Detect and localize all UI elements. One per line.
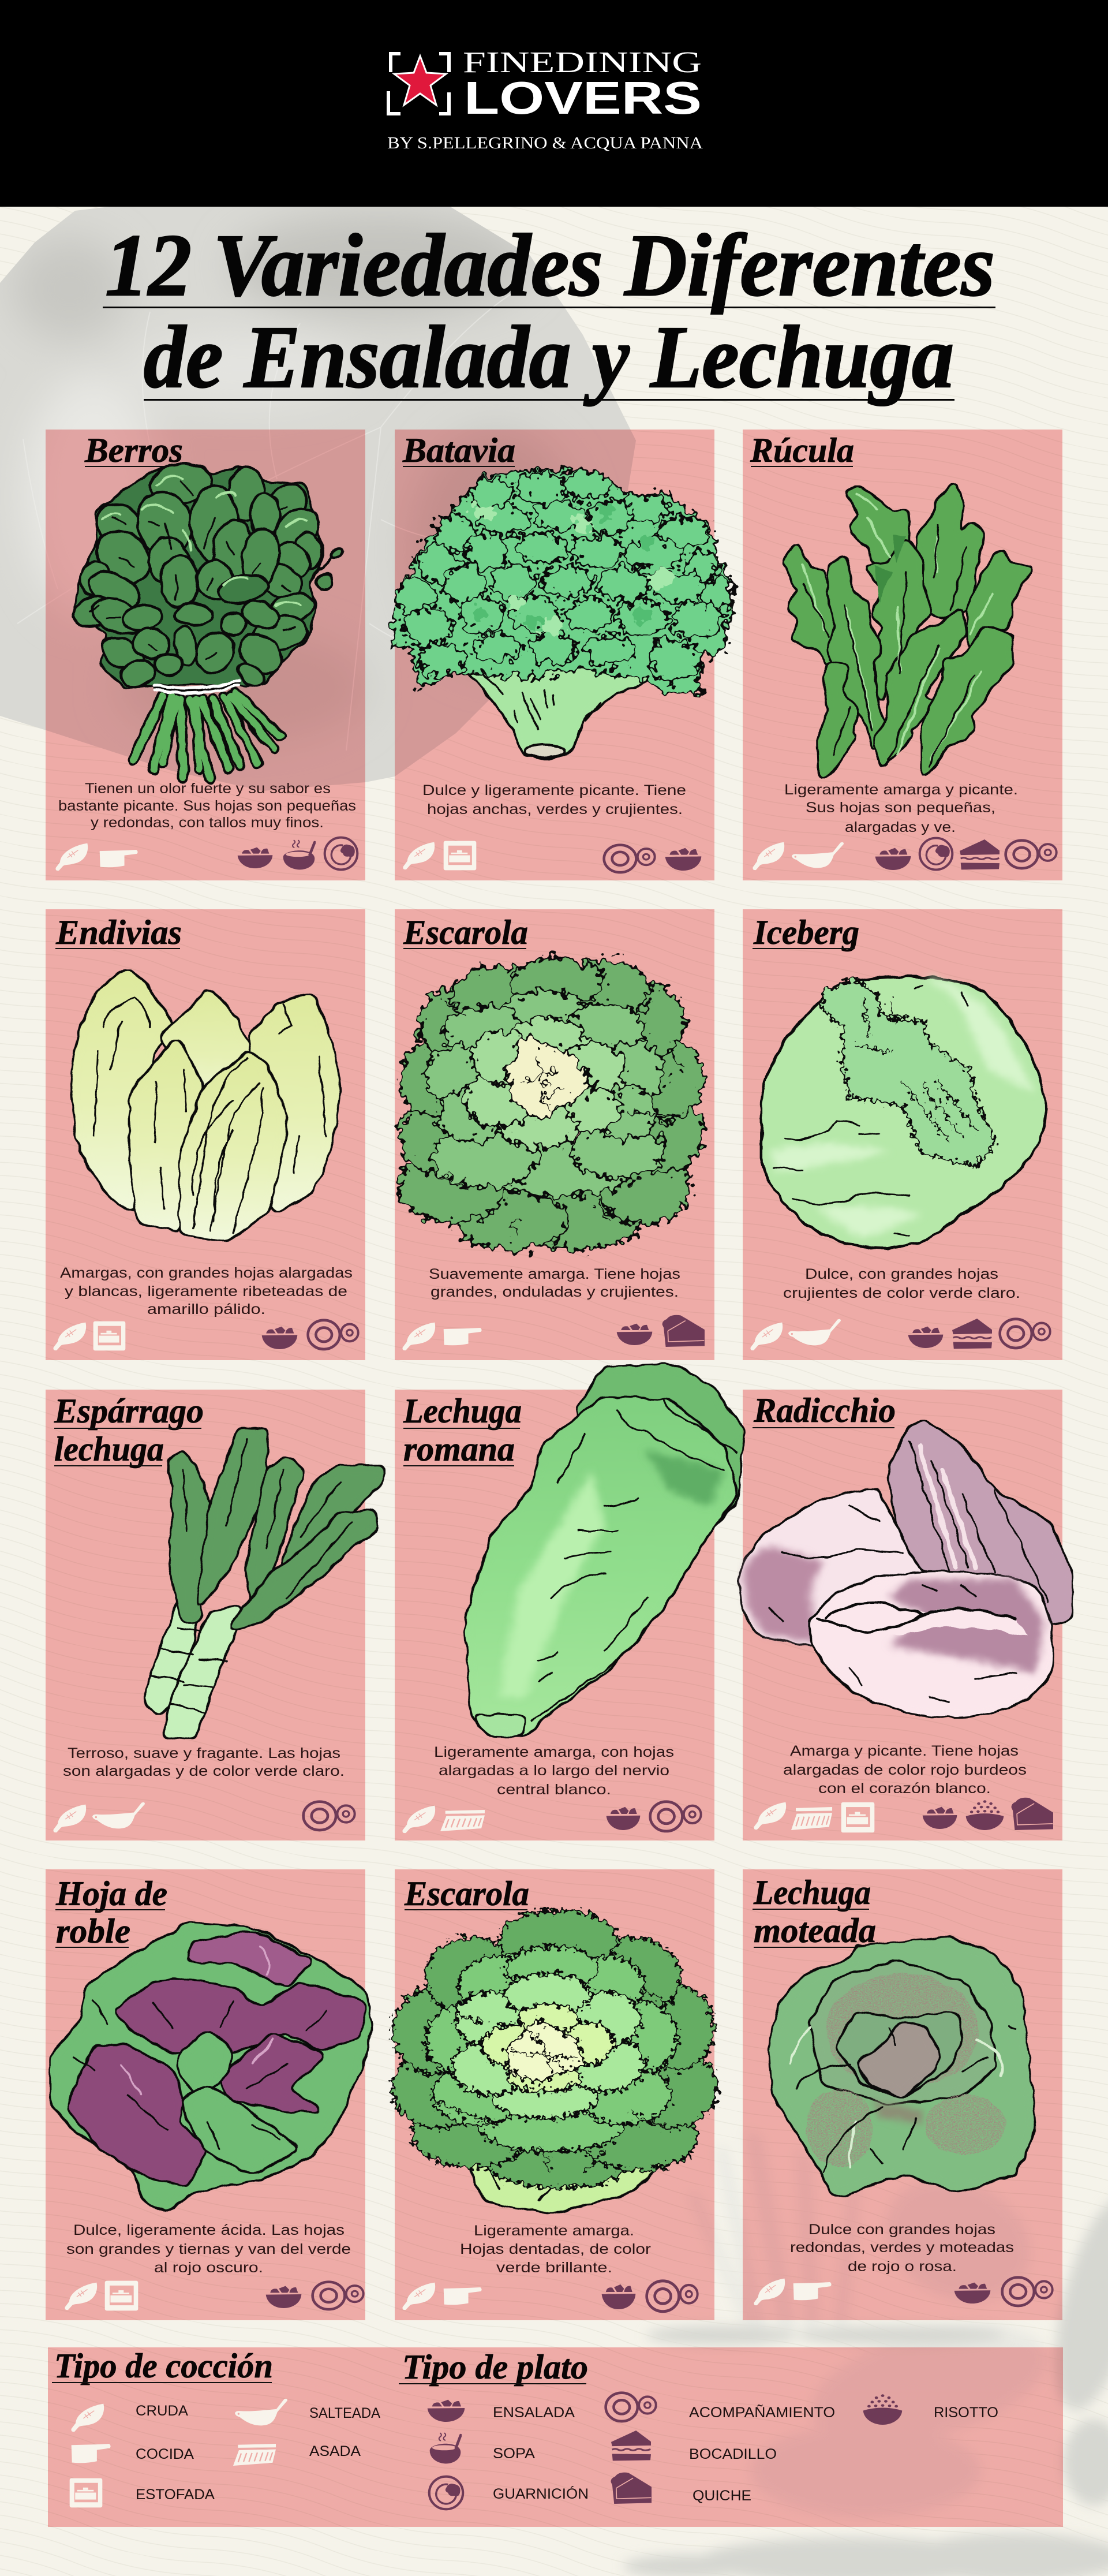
cooking type icons <box>53 1802 145 1832</box>
description: Ligeramente amarga. <box>474 2223 634 2239</box>
dish type icons <box>875 838 1057 870</box>
legend item: acompañamiento: ACOMPAÑAMIENTO <box>689 2404 835 2421</box>
heading: Hoja de <box>55 1875 167 1913</box>
card background <box>743 1869 1062 2320</box>
description: Tienen un olor fuerte y su sabor es <box>85 781 331 797</box>
title: de Ensalada y Lechuga <box>144 308 954 406</box>
card background <box>395 1390 714 1840</box>
panel: Iceberg <box>743 909 1062 1360</box>
logo <box>387 46 703 152</box>
description <box>429 1266 680 1300</box>
legend item: cocida <box>72 2444 194 2463</box>
heading: Escarola <box>403 913 528 951</box>
description <box>783 1743 1027 1797</box>
description: son grandes y tiernas y van del verde <box>66 2241 351 2257</box>
cooking type icons <box>53 1321 125 1350</box>
icon: red star <box>394 56 446 105</box>
illustration: batavia lettuce <box>394 470 736 759</box>
description: Sus hojas son pequeñas, <box>806 800 995 816</box>
description <box>63 1745 345 1779</box>
legend item: ensalada <box>428 2400 575 2422</box>
dish type icons <box>262 1320 358 1349</box>
description <box>58 781 356 831</box>
description: verde brillante. <box>496 2260 612 2276</box>
heading: Escarola <box>404 1875 529 1913</box>
dish type icons <box>266 2282 364 2309</box>
heading: Endivias <box>55 913 182 951</box>
description: Suavemente amarga. Tiene hojas <box>429 1266 680 1282</box>
panel: Endivias <box>46 909 365 1360</box>
description: redondas, verdes y moteadas <box>790 2239 1014 2256</box>
legend item: ensalada: ENSALADA <box>493 2405 575 2421</box>
description: Dulce, ligeramente ácida. Las hojas <box>73 2222 345 2238</box>
legend item: asada: ASADA <box>309 2443 361 2459</box>
legend item: acompañamiento <box>606 2393 835 2421</box>
legend item: risotto <box>863 2394 998 2425</box>
legend item: asada <box>233 2443 361 2466</box>
legend item: salteada <box>235 2399 380 2425</box>
cooking type icons <box>55 843 138 871</box>
cooking type icons <box>402 1806 485 1833</box>
description: Dulce y ligeramente picante. Tiene <box>422 782 686 798</box>
dish type icons <box>602 2281 698 2312</box>
description: central blanco. <box>497 1782 611 1798</box>
cooking type icons <box>402 1323 482 1350</box>
description: Hojas dentadas, de color <box>460 2241 651 2257</box>
panel: Escarola rizada <box>392 1869 717 2320</box>
description: de rojo o rosa. <box>848 2258 957 2275</box>
cooking type icons <box>754 2279 832 2305</box>
title: 12 Variedades Diferentes <box>105 216 995 315</box>
logo wordmark bold: LOVERS <box>464 72 702 124</box>
card background <box>395 1869 714 2320</box>
description: Dulce con grandes hojas <box>808 2222 995 2238</box>
illustration: escarole <box>399 958 703 1249</box>
title <box>103 216 995 406</box>
description <box>460 2223 651 2276</box>
heading: dish type: Tipo de plato <box>402 2348 588 2386</box>
dish type icons <box>954 2278 1053 2306</box>
illustration: iceberg lettuce <box>761 976 1045 1249</box>
illustration: arugula leaves <box>782 482 1032 778</box>
dish type icons <box>908 1319 1050 1349</box>
logo tagline: BY S.PELLEGRINO & ACQUA PANNA <box>387 134 703 152</box>
illustration: speckled lettuce <box>770 1937 1035 2197</box>
heading: Iceberg <box>753 913 859 951</box>
heading: Lechuga <box>753 1873 871 1912</box>
heading <box>54 1392 204 1468</box>
legend item: cocida: COCIDA <box>136 2446 194 2462</box>
heading: lechuga <box>54 1430 164 1468</box>
card background <box>46 430 365 880</box>
legend item: salteada: SALTEADA <box>309 2405 380 2421</box>
heading <box>55 1875 167 1950</box>
heading: Berros <box>84 431 183 469</box>
legend item: cruda: CRUDA <box>136 2403 188 2419</box>
cooking type icons <box>65 2281 138 2310</box>
description <box>434 1744 674 1798</box>
dish type icons <box>238 838 357 869</box>
cooking type icons <box>754 1802 874 1832</box>
logo wordmark: FINEDINING <box>463 46 702 79</box>
panel: Rúcula <box>743 430 1062 880</box>
description <box>790 2222 1014 2275</box>
legend item: sopa <box>430 2433 535 2463</box>
card background <box>395 909 714 1360</box>
description: y redondas, con tallos muy finos. <box>91 815 324 831</box>
panel: legend <box>48 2347 1063 2527</box>
heading: romana <box>403 1430 515 1468</box>
heading: Lechuga <box>403 1392 522 1430</box>
description: Ligeramente amarga, con hojas <box>434 1744 674 1760</box>
panel: Batavia <box>394 430 736 880</box>
legend item: sopa: SOPA <box>493 2446 535 2462</box>
dish type icons <box>617 1315 705 1347</box>
panel: Berros <box>46 430 365 880</box>
heading: cooking type: Tipo de cocción <box>54 2347 273 2385</box>
legend item: estofada <box>70 2478 215 2507</box>
panel: Radicchio <box>740 1390 1072 1840</box>
legend item: bocadillo: BOCADILLO <box>689 2446 777 2462</box>
card background <box>395 430 714 880</box>
legend item: estofada: ESTOFADA <box>136 2487 215 2503</box>
heading: Espárrago <box>54 1392 204 1430</box>
description: alargadas a lo largo del nervio <box>439 1763 669 1779</box>
description <box>783 1266 1020 1301</box>
card background <box>46 1390 365 1840</box>
legend item: guarnición: GUARNICIÓN <box>493 2485 589 2502</box>
card background <box>46 909 365 1360</box>
card background <box>743 430 1062 880</box>
description: alargadas y ve. <box>845 819 956 835</box>
description: alargadas de color rojo burdeos <box>783 1762 1027 1778</box>
description: hojas anchas, verdes y crujientes. <box>427 801 683 817</box>
heading: Radicchio <box>753 1391 896 1429</box>
card background <box>743 909 1062 1360</box>
illustration: curly endive <box>392 1910 717 2213</box>
heading <box>753 1873 876 1950</box>
cooking type icons <box>750 1319 841 1350</box>
legend item: bocadillo <box>611 2431 777 2462</box>
description: al rojo oscuro. <box>154 2260 263 2276</box>
description: Amargas, con grandes hojas alargadas <box>60 1265 353 1281</box>
background photo: savoy cabbage <box>0 207 641 796</box>
description: amarillo pálido. <box>147 1301 265 1317</box>
panel: Lechuga romana <box>395 1365 743 1840</box>
description: Ligeramente amarga y picante. <box>784 782 1018 798</box>
heading: moteada <box>754 1912 876 1950</box>
cooking type icons <box>753 842 844 870</box>
description: son alargadas y de color verde claro. <box>63 1763 345 1779</box>
illustration: watercress bunch <box>72 460 343 778</box>
heading: Rúcula <box>750 431 854 469</box>
description <box>60 1265 353 1317</box>
description: Amarga y picante. Tiene hojas <box>790 1743 1019 1759</box>
description <box>784 782 1018 835</box>
dish type icons <box>304 1802 355 1830</box>
description: y blancas, ligeramente ribeteadas de <box>65 1283 347 1300</box>
description: Dulce, con grandes hojas <box>805 1266 998 1282</box>
dish type icons <box>923 1798 1053 1830</box>
legend background <box>48 2347 1063 2527</box>
panel: Hoja de roble <box>46 1869 372 2320</box>
panel: Espárrago lechuga <box>46 1390 383 1840</box>
legend item: quiche <box>611 2473 751 2504</box>
heading <box>403 1392 522 1468</box>
description: grandes, onduladas y crujientes. <box>431 1284 679 1300</box>
legend item: quiche: QUICHE <box>692 2488 751 2504</box>
background photo: herbs and leaves <box>623 2130 1108 2576</box>
illustration: radicchio <box>740 1421 1072 1716</box>
description <box>66 2222 351 2276</box>
illustration: endives <box>71 969 339 1240</box>
panel: Lechuga moteada <box>743 1869 1062 2320</box>
header bar <box>0 0 1108 207</box>
cooking type icons <box>403 841 476 870</box>
description: crujientes de color verde claro. <box>783 1285 1020 1301</box>
description: bastante picante. Sus hojas son pequeñas <box>58 798 356 814</box>
card background <box>46 1869 365 2320</box>
illustration: oak leaf lettuce <box>51 1924 372 2211</box>
heading: roble <box>56 1912 130 1950</box>
illustration: romaine lettuce <box>465 1365 743 1736</box>
dish type icons <box>607 1802 701 1831</box>
illustration: asparagus lettuce <box>144 1428 383 1739</box>
card background <box>743 1390 1062 1840</box>
description <box>422 782 686 817</box>
cooking type icons <box>402 2283 482 2310</box>
description: Terroso, suave y fragante. Las hojas <box>68 1745 340 1761</box>
heading: Batavia <box>402 431 515 469</box>
description: con el corazón blanco. <box>818 1780 991 1797</box>
dish type icons <box>604 845 701 872</box>
legend item: risotto: RISOTTO <box>934 2405 998 2421</box>
legend item: guarnición <box>429 2477 589 2509</box>
icon: camera frame brackets <box>388 54 449 114</box>
panel: Escarola <box>395 909 714 1360</box>
legend item: cruda <box>71 2403 188 2432</box>
